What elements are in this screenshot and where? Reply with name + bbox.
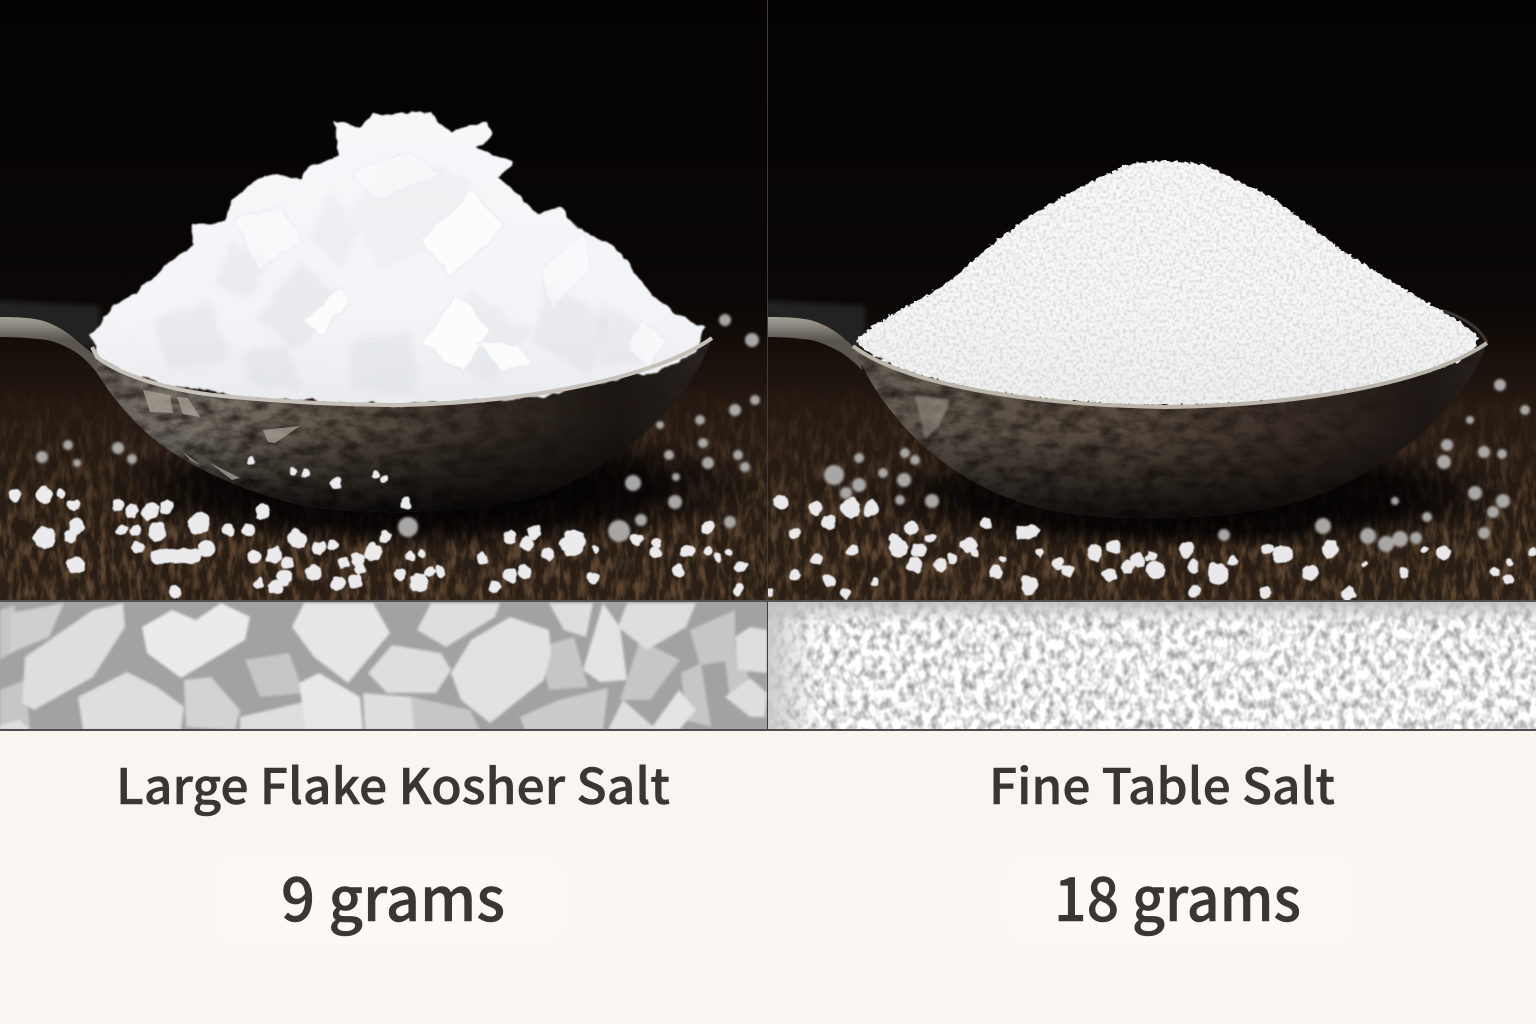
spoon rim — [853, 343, 1487, 407]
value pill: right — [1003, 854, 1355, 946]
label: large flake kosher salt: Large Flake Kosher Salt — [116, 748, 670, 819]
scattered flakes — [9, 457, 747, 598]
value: 18 grams: 18 grams — [1054, 850, 1301, 939]
dark backdrop and wood surface — [768, 0, 1536, 600]
salt mound: large flakes — [90, 113, 706, 405]
scattered grains — [766, 495, 1536, 600]
large flake crystals — [252, 197, 658, 370]
close-up strip: kosher flakes — [0, 602, 767, 730]
label: fine table salt: Fine Table Salt — [989, 748, 1335, 819]
panel: large flake kosher salt photo — [0, 0, 770, 600]
dim background grains — [824, 379, 1530, 552]
panel: fine table salt photo — [760, 0, 1536, 600]
spoon rim — [92, 338, 712, 405]
close-up strip: fine grains — [768, 602, 1536, 730]
spoon handle — [760, 300, 865, 370]
dividers and strip borders — [0, 0, 1536, 731]
spoon bowl — [85, 335, 715, 520]
salt mound: fine grains — [850, 155, 1485, 410]
dim background flakes — [36, 314, 760, 542]
value pill: left — [214, 854, 566, 946]
dark backdrop and wood surface — [0, 0, 770, 600]
value: 9 grams: 9 grams — [281, 850, 505, 939]
spoon bowl — [850, 310, 1490, 530]
spoon handle — [0, 300, 100, 373]
